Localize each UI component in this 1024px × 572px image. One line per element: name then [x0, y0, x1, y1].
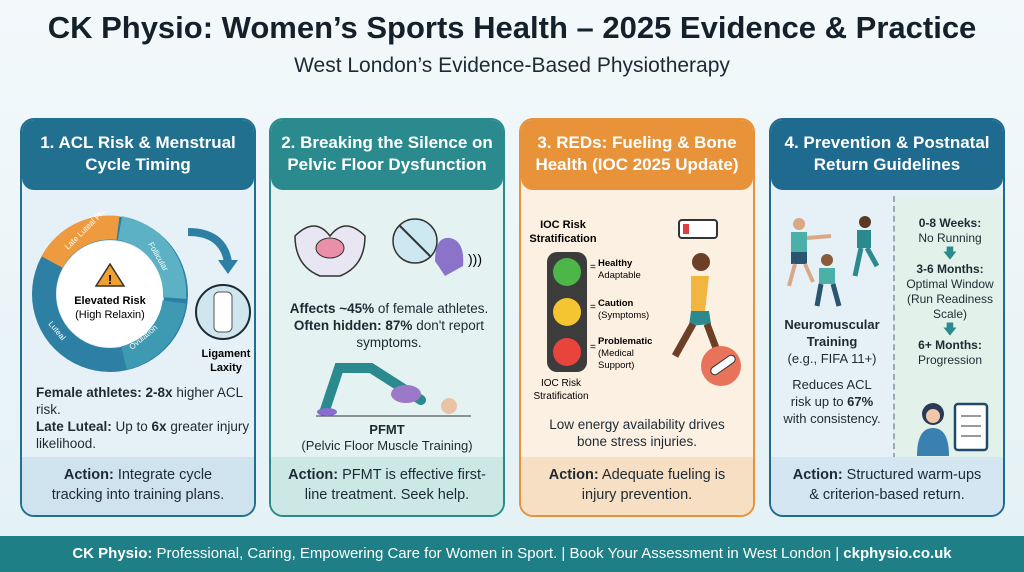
text block: bone stress injuries. — [577, 434, 697, 449]
PFMT caption — [301, 422, 473, 453]
action box: Action: Adequate fueling is — [549, 467, 725, 483]
traffic light chart: (Medical — [598, 348, 634, 359]
neuromuscular text — [784, 317, 880, 366]
heading 1: 1. ACL Risk & Menstrual — [40, 133, 236, 152]
action box: & criterion-based return. — [809, 487, 965, 503]
heading 4 — [771, 120, 1003, 190]
heading 2: 2. Breaking the Silence on — [281, 133, 493, 152]
heading 1: Cycle Timing — [85, 155, 191, 174]
action box: tracking into training plans. — [52, 487, 224, 503]
timeline: 3-6 Months: — [916, 262, 984, 276]
traffic light chart: Adaptable — [598, 270, 641, 281]
right timeline background — [893, 196, 1007, 459]
panel: prevention & postnatal — [769, 118, 1005, 517]
illustration: glute bridge — [316, 363, 471, 416]
chart: cycle wheel: Luteal — [46, 320, 68, 342]
traffic light chart: Stratification — [533, 391, 589, 402]
action box — [271, 457, 503, 515]
timeline: No Running — [918, 231, 982, 245]
timeline: 🡇 — [943, 245, 957, 261]
panel: pelvic floor — [269, 118, 505, 517]
heading 2: Pelvic Floor Dysfunction — [287, 155, 487, 174]
neuromuscular text: (e.g., FIFA 11+) — [788, 351, 876, 366]
timeline: 🡇 — [943, 321, 957, 337]
action box: Action: Integrate cycle — [64, 467, 212, 483]
chart: cycle wheel: ! — [108, 272, 112, 287]
traffic light chart: Problematic — [598, 336, 652, 347]
icon: runner and bone — [672, 219, 741, 386]
footer — [0, 536, 1024, 572]
heading 4: 4. Prevention & Postnatal — [784, 133, 990, 152]
traffic light chart: Stratification — [529, 233, 597, 245]
traffic light chart: Support) — [598, 360, 634, 371]
heading 3: 3. REDs: Fueling & Bone — [537, 133, 737, 152]
text block: Low energy availability drives — [549, 417, 725, 432]
traffic light chart: IOC Risk — [540, 219, 587, 231]
traffic light chart: = — [590, 302, 596, 313]
action box: injury prevention. — [582, 487, 692, 503]
chart: cycle wheel: (High Relaxin) — [75, 309, 145, 321]
PFMT caption: PFMT — [369, 422, 405, 437]
traffic light chart: = — [590, 262, 596, 273]
heading 3: Health (IOC 2025 Update) — [535, 155, 739, 174]
traffic light chart — [529, 219, 652, 402]
PFMT caption: (Pelvic Floor Muscle Training) — [301, 438, 473, 453]
chart: cycle wheel — [32, 212, 251, 374]
panel: ACL risk — [20, 118, 256, 517]
traffic light chart: = — [590, 342, 596, 353]
icon: exercising figures — [787, 216, 880, 307]
heading 1 — [22, 120, 254, 190]
timeline: 6+ Months: — [918, 338, 982, 352]
text block — [36, 385, 250, 451]
stats text: Often hidden: 87% don't report symptoms. — [294, 318, 484, 350]
neuromuscular text: Neuromuscular Training — [784, 317, 880, 349]
chart: cycle wheel: Follicular — [146, 240, 170, 273]
text block: Female athletes: 2-8x higher ACL risk. — [36, 385, 243, 417]
timeline: 0-8 Weeks: — [919, 216, 981, 230]
icons: pelvis and silence — [294, 218, 482, 277]
chart: cycle wheel: Ligament — [202, 348, 251, 360]
action box — [521, 457, 753, 515]
footer: CK Physio: Professional, Caring, Empowering Care for Women in Sport. | Book Your Assessment in West London | ckphysio.co.uk — [72, 545, 952, 562]
traffic light chart: Healthy — [598, 258, 633, 269]
icon: mother and checklist — [917, 402, 988, 456]
timeline: Progression — [918, 353, 982, 367]
traffic light chart: IOC Risk — [541, 378, 582, 389]
text block — [549, 417, 725, 449]
icons: pelvis and silence: ))) — [468, 251, 482, 267]
stats text — [290, 301, 488, 350]
traffic light chart: (Symptoms) — [598, 310, 649, 321]
heading 3 — [521, 120, 753, 190]
subtitle: West London’s Evidence-Based Physiotherapy — [294, 54, 730, 77]
stats text: Affects ~45% of female athletes. — [290, 301, 488, 316]
chart: cycle wheel: Ovulation — [128, 323, 159, 352]
action box: Action: PFMT is effective first- — [288, 467, 486, 483]
chart: cycle wheel: Laxity — [210, 362, 243, 374]
chart: cycle wheel: Elevated Risk — [74, 295, 147, 307]
action box: Action: Structured warm-ups — [793, 467, 981, 483]
panel: REDs — [519, 118, 755, 517]
text block: Late Luteal: Up to 6x greater injury likelihood. — [36, 419, 249, 451]
action box: line treatment. Seek help. — [305, 487, 469, 503]
title: CK Physio: Women’s Sports Health – 2025 Evidence & Practice — [48, 10, 976, 45]
heading 4: Return Guidelines — [814, 155, 960, 174]
action box — [22, 457, 254, 515]
action box — [771, 457, 1003, 515]
traffic light chart: Caution — [598, 298, 634, 309]
timeline — [906, 216, 994, 367]
heading 2 — [271, 120, 503, 190]
timeline: Optimal Window (Run Readiness Scale) — [906, 277, 994, 321]
stat text: Reduces ACL risk up to 67% with consistency. — [783, 377, 881, 426]
